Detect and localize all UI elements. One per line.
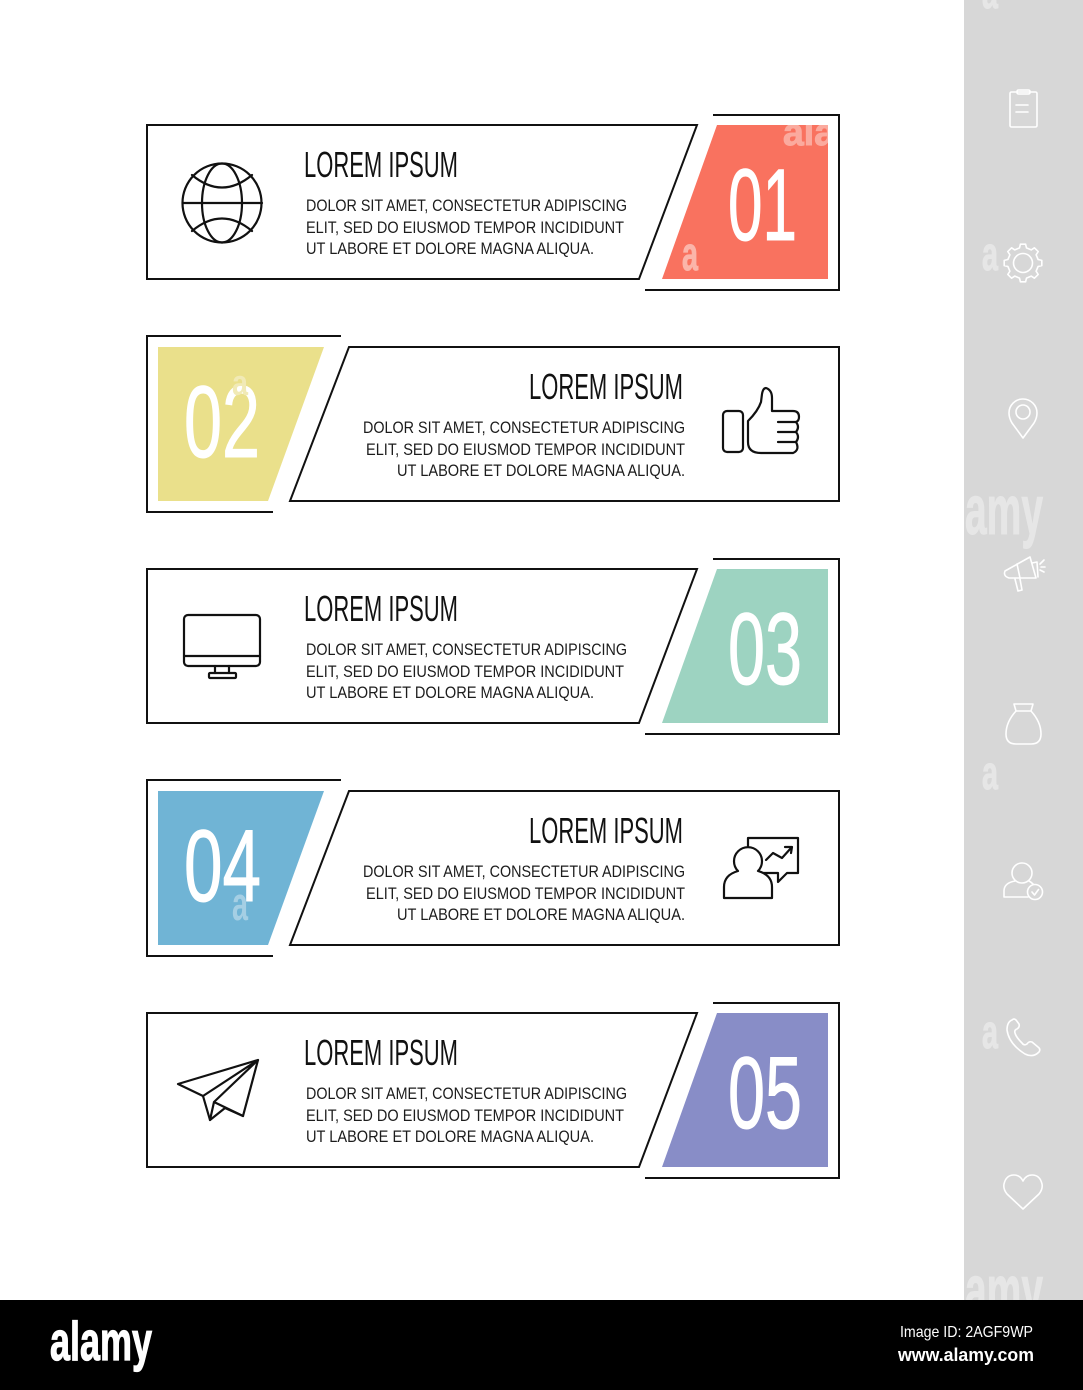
- icon: megaphone: [1004, 557, 1045, 591]
- number 03: 03: [728, 592, 802, 706]
- panel: item 05: [147, 1003, 839, 1178]
- sidebar watermarks: a: [982, 746, 999, 799]
- image id: Image ID: 2AGF9WP: [900, 1324, 1033, 1341]
- text block 01: [306, 196, 627, 258]
- heading 03: LOREM IPSUM: [304, 588, 458, 629]
- panel: item 01: [147, 115, 839, 290]
- outline box 04: [290, 791, 839, 945]
- watermarks on colour blocks: [232, 112, 836, 930]
- text block 02: [363, 418, 685, 480]
- footer bar: [0, 1300, 1083, 1390]
- icon: thumbs up: [723, 388, 799, 453]
- sidebar watermarks: a: [982, 1005, 999, 1058]
- sidebar watermarks: [965, 0, 1043, 1329]
- icon: paper plane: [178, 1060, 258, 1120]
- text block 05: ELIT, SED DO EIUSMOD TEMPOR INCIDIDUNT: [306, 1106, 624, 1125]
- outline box 01: [147, 125, 697, 279]
- logo: alamy: alamy: [50, 1310, 152, 1372]
- text block 04: [363, 862, 685, 924]
- text block 04: UT LABORE ET DOLORE MAGNA ALIQUA.: [397, 905, 685, 924]
- watermarks on colour blocks: a: [232, 877, 249, 930]
- text block 01: ELIT, SED DO EIUSMOD TEMPOR INCIDIDUNT: [306, 218, 624, 237]
- text block 05: [306, 1084, 627, 1146]
- text block 02: ELIT, SED DO EIUSMOD TEMPOR INCIDIDUNT: [366, 440, 685, 459]
- text block 02: UT LABORE ET DOLORE MAGNA ALIQUA.: [397, 461, 685, 480]
- colour block 04: [158, 791, 324, 945]
- icon: user with check: [1004, 863, 1042, 900]
- panel: item 04: [147, 780, 839, 956]
- panel: item 02: [147, 336, 839, 512]
- text block 03: DOLOR SIT AMET, CONSECTETUR ADIPISCING: [306, 640, 627, 659]
- text block 02: DOLOR SIT AMET, CONSECTETUR ADIPISCING: [363, 418, 685, 437]
- icon: heart: [1004, 1175, 1042, 1209]
- number 01: 01: [728, 148, 797, 262]
- bracket 01: [645, 115, 839, 290]
- website: www.alamy.com: [897, 1345, 1034, 1365]
- panel: item 03: [147, 559, 839, 734]
- number 02: 02: [184, 365, 260, 479]
- outline box 05: [147, 1013, 697, 1167]
- colour block 02: [158, 347, 324, 501]
- bracket 02: [147, 336, 341, 512]
- icon: clipboard: [1010, 90, 1037, 127]
- heading 01: LOREM IPSUM: [304, 144, 458, 185]
- text block 05: UT LABORE ET DOLORE MAGNA ALIQUA.: [306, 1127, 594, 1146]
- number 04: 04: [184, 809, 261, 923]
- panel: grey icon sidebar: [964, 0, 1083, 1329]
- text block 03: UT LABORE ET DOLORE MAGNA ALIQUA.: [306, 683, 594, 702]
- icon: monitor: [184, 615, 260, 678]
- colour block 01: [662, 125, 828, 279]
- watermarks on colour blocks: a: [232, 362, 249, 403]
- text block 01: UT LABORE ET DOLORE MAGNA ALIQUA.: [306, 239, 594, 258]
- bracket 04: [147, 780, 341, 956]
- heading 02: LOREM IPSUM: [529, 366, 683, 407]
- number 05: 05: [728, 1036, 802, 1150]
- icon: presenter with chart: [724, 838, 798, 898]
- text block 01: DOLOR SIT AMET, CONSECTETUR ADIPISCING: [306, 196, 627, 215]
- sidebar watermarks: a: [982, 227, 999, 280]
- icon: globe: [182, 164, 262, 242]
- heading 04: LOREM IPSUM: [529, 810, 683, 851]
- colour block 05: [662, 1013, 828, 1167]
- text block 04: DOLOR SIT AMET, CONSECTETUR ADIPISCING: [363, 862, 685, 881]
- colour block 03: [662, 569, 828, 723]
- watermarks on colour blocks: a: [682, 227, 699, 280]
- icon: money sack: [1006, 704, 1041, 744]
- text block 03: [306, 640, 627, 702]
- bracket 03: [645, 559, 839, 734]
- icon: phone: [1007, 1019, 1040, 1056]
- outline box 03: [147, 569, 697, 723]
- text block 05: DOLOR SIT AMET, CONSECTETUR ADIPISCING: [306, 1084, 627, 1103]
- outline box 02: [290, 347, 839, 501]
- bracket 05: [645, 1003, 839, 1178]
- icon: gear: [1004, 244, 1042, 282]
- watermarks on colour blocks: ala: [783, 112, 836, 154]
- text block 04: ELIT, SED DO EIUSMOD TEMPOR INCIDIDUNT: [366, 884, 685, 903]
- icon: map pin: [1009, 399, 1037, 438]
- heading 05: LOREM IPSUM: [304, 1032, 458, 1073]
- text block 03: ELIT, SED DO EIUSMOD TEMPOR INCIDIDUNT: [306, 662, 624, 681]
